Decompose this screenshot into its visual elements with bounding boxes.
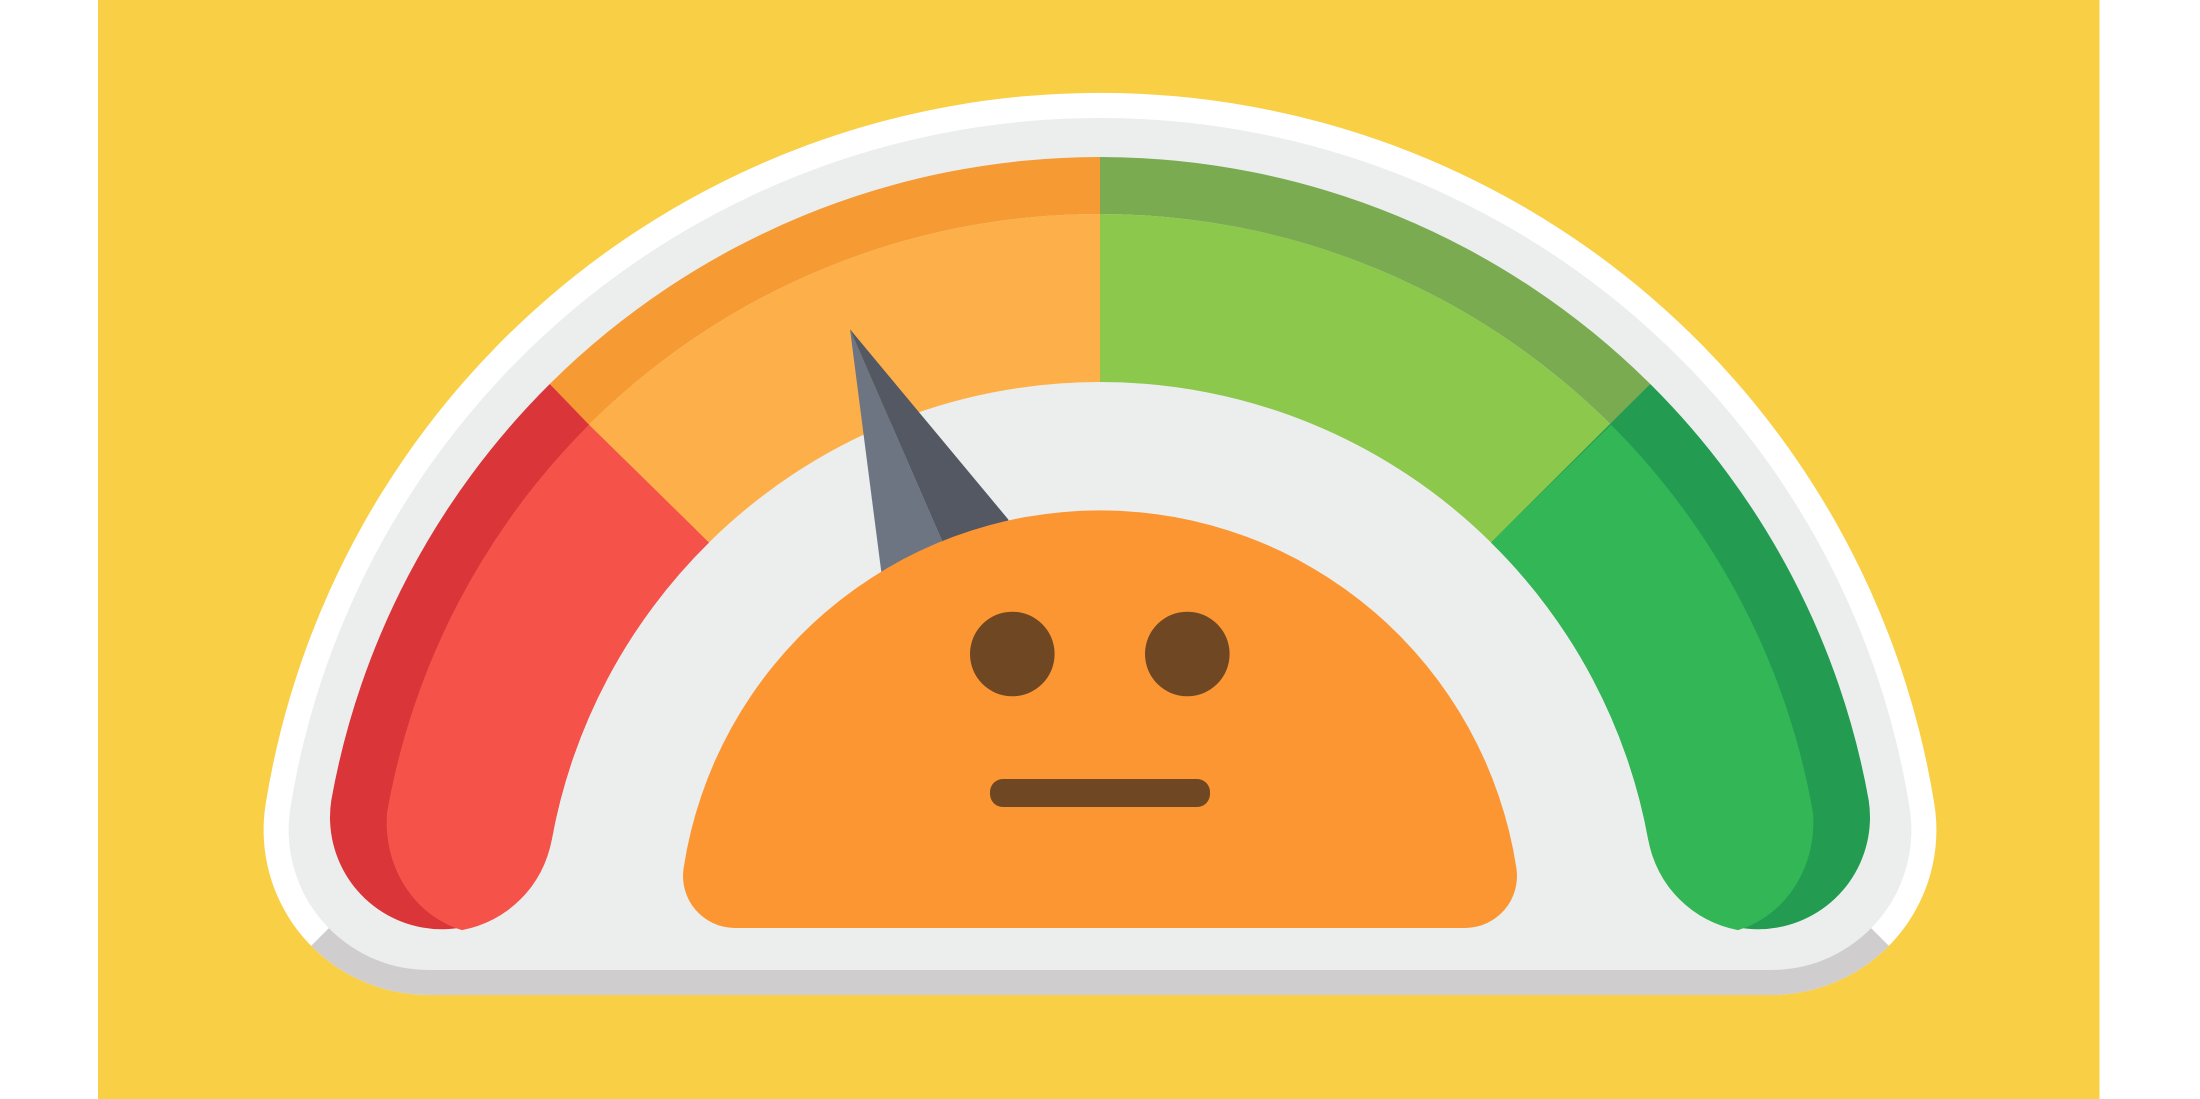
gauge segment: red	[330, 384, 709, 930]
orange outer shade	[550, 157, 1100, 425]
gauge body	[264, 93, 1936, 995]
orange main	[589, 214, 1100, 542]
light green main	[1100, 214, 1611, 542]
light green outer shade	[1100, 157, 1650, 425]
light grey dial plate	[289, 118, 1911, 970]
gauge segment: green	[1491, 384, 1870, 930]
outer white rim	[264, 93, 1936, 995]
gauge segment: light green	[1100, 157, 1650, 542]
needle	[850, 329, 1010, 575]
green outer shade	[1491, 384, 1870, 929]
face features	[970, 612, 1230, 807]
needle light facet	[850, 329, 945, 575]
bottom grey shadow of rim	[311, 928, 1889, 995]
green main	[1491, 425, 1813, 930]
face dome	[683, 510, 1517, 928]
left eye	[970, 612, 1055, 696]
red outer shade	[330, 384, 709, 929]
right eye	[1145, 612, 1230, 696]
red main	[387, 425, 709, 930]
neutral mouth	[990, 779, 1210, 807]
needle dark facet	[850, 329, 1010, 550]
gauge segment: orange	[550, 157, 1100, 542]
